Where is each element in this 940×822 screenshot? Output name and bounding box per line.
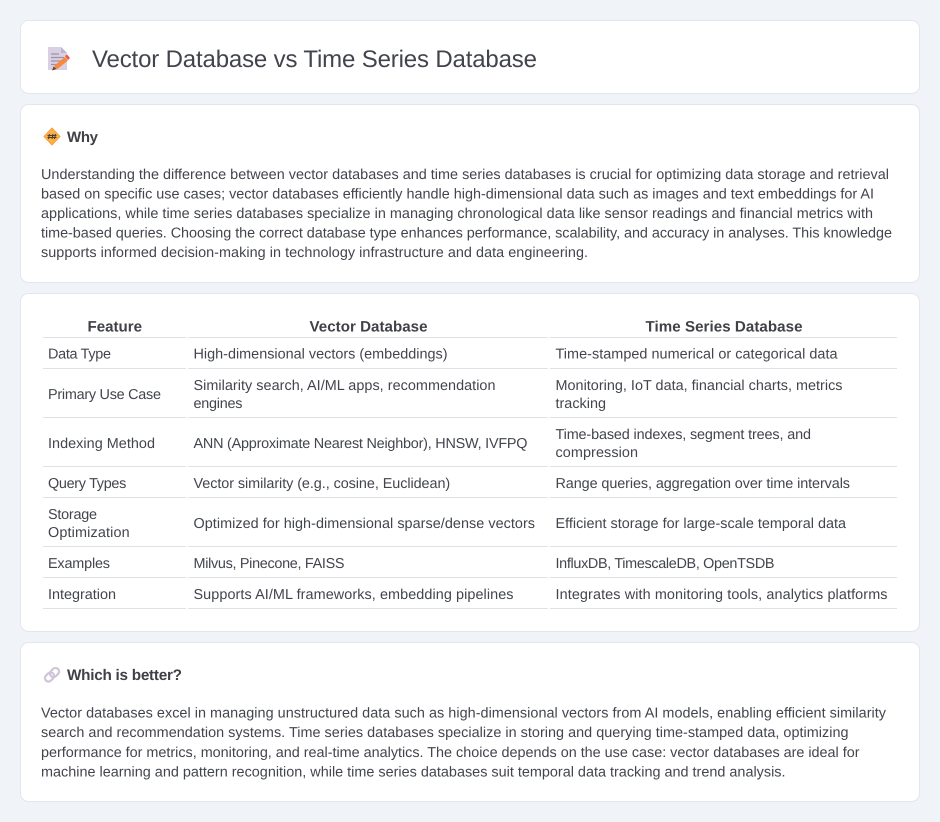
row: query types: Vector similarity (e.g., cosine, Euclidean) — [194, 476, 450, 492]
row: query types: Query Types — [48, 476, 126, 492]
row: data type — [43, 346, 897, 369]
text block: why explanation — [41, 167, 892, 261]
row: primary use case: Primary Use Case — [48, 387, 161, 403]
row: primary use case: Similarity search, AI/ML apps, recommendation — [194, 378, 496, 394]
panel: title header — [20, 20, 920, 94]
text block: which is better explanation: machine learning and pattern recognition, while time series databases suit temporal data tracking and trend analysis. — [41, 764, 786, 780]
table header row: Time Series Database — [646, 318, 802, 336]
table header row: Feature — [88, 318, 142, 336]
text block: why explanation: applications, while time series databases specialize in managing chronological data like sensor readings and financial metrics with — [41, 206, 873, 222]
row: storage optimization: Optimization — [48, 525, 130, 541]
row: storage optimization — [43, 507, 897, 547]
row: data type: Data Type — [48, 346, 111, 362]
row: data type: High-dimensional vectors (embeddings) — [194, 346, 448, 362]
row: storage optimization: Optimized for high-dimensional sparse/dense vectors — [194, 516, 535, 532]
row: examples: Examples — [48, 556, 110, 572]
row: storage optimization: Efficient storage for large-scale temporal data — [556, 516, 846, 532]
heading: why: Why — [67, 129, 99, 146]
title: Vector Database vs Time Series Database — [92, 46, 537, 73]
row: indexing method: Time-based indexes, segment trees, and — [556, 427, 811, 443]
row: indexing method — [43, 427, 897, 467]
row: integration: Integration — [48, 587, 116, 603]
table header row: Vector Database — [310, 318, 428, 336]
icon: orange diamond — [44, 128, 60, 145]
row: data type: Time-stamped numerical or categorical data — [556, 346, 838, 362]
text block: why explanation: based on specific use cases; vector databases efficiently handle high-dimensional data such as images and text embeddings for AI — [41, 186, 874, 202]
row: examples: Milvus, Pinecone, FAISS — [194, 556, 344, 572]
row: indexing method: Indexing Method — [48, 436, 155, 452]
panel: comparison table — [20, 294, 920, 632]
text block: which is better explanation: performance for metrics, monitoring, and real-time analytics. The choice depends on the use case: vector databases are ideal for — [41, 745, 860, 761]
text block: which is better explanation: Vector databases excel in managing unstructured data such as high-dimensional vectors from AI models, enabling efficient similarity — [41, 706, 887, 722]
row: integration: Integrates with monitoring tools, analytics platforms — [556, 587, 888, 603]
panel: why — [20, 104, 920, 282]
text block: why explanation: supports informed decision-making in technology infrastructure and data engineering. — [41, 245, 588, 261]
row: indexing method: compression — [556, 445, 638, 461]
icon: chain link — [43, 666, 61, 683]
row: examples: InfluxDB, TimescaleDB, OpenTSDB — [556, 556, 774, 572]
heading: which is better: Which is better? — [67, 667, 182, 684]
row: primary use case — [43, 378, 897, 418]
row: primary use case: tracking — [556, 396, 606, 412]
panel: which is better — [20, 642, 920, 802]
row: primary use case: engines — [194, 396, 242, 412]
text block: which is better explanation: search and recommendation systems. Time series databases specialize in storing and querying time-stamped data, optimizing — [41, 725, 848, 741]
row: query types: Range queries, aggregation over time intervals — [556, 476, 850, 492]
text block: which is better explanation — [41, 706, 887, 780]
row: query types — [43, 476, 897, 498]
icon: memo with pencil — [48, 47, 70, 70]
row: integration: Supports AI/ML frameworks, embedding pipelines — [194, 587, 514, 603]
row: integration — [43, 587, 897, 609]
row: primary use case: Monitoring, IoT data, financial charts, metrics — [556, 378, 842, 394]
row: examples — [43, 556, 897, 578]
text block: why explanation: time-based queries. Choosing the correct database type enhances performance, scalability, and accuracy in analyses. This knowledge — [41, 226, 892, 242]
row: indexing method: ANN (Approximate Nearest Neighbor), HNSW, IVFPQ — [194, 436, 528, 452]
text block: why explanation: Understanding the difference between vector databases and time series databases is crucial for optimizing data storage and retrieval — [41, 167, 889, 183]
table header row — [43, 318, 897, 338]
row: storage optimization: Storage — [48, 507, 97, 523]
